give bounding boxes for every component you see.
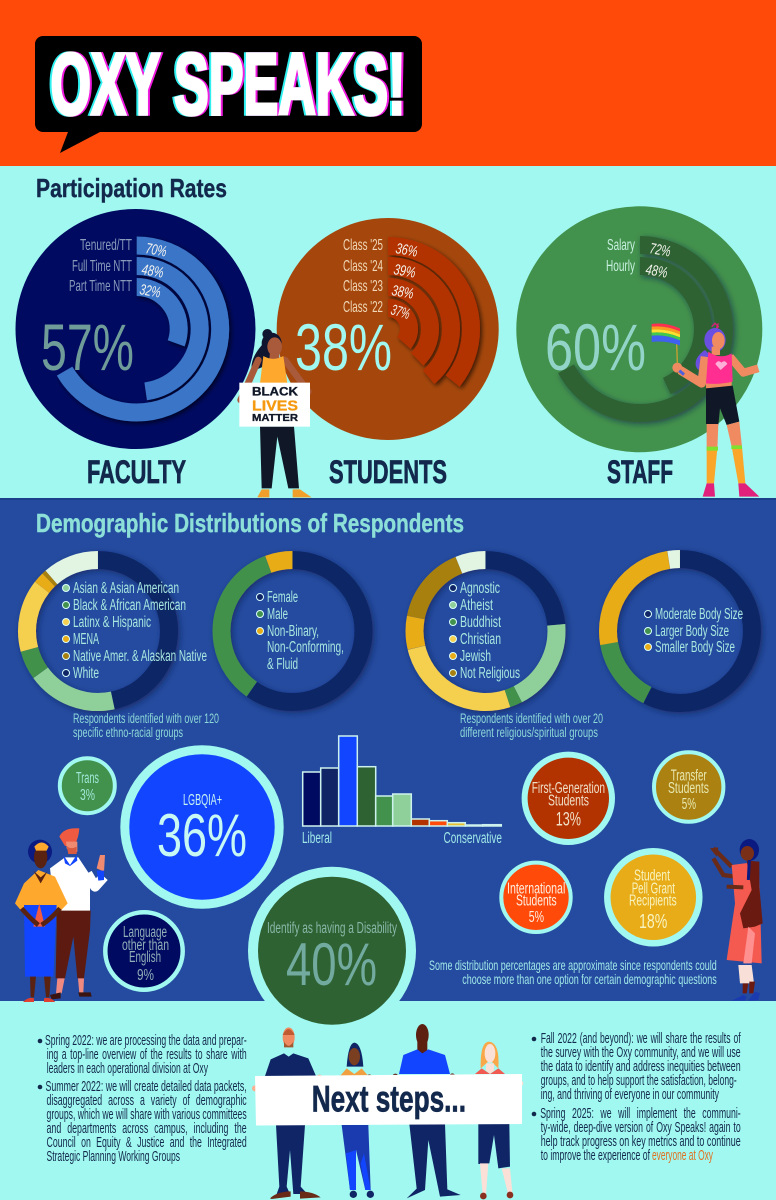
stat: language: English (129, 949, 161, 966)
donut: ethno-racial (0, 531, 219, 740)
text: next steps left column: Summer 2022: we will create detailed data packets, (46, 1078, 247, 1095)
pride flag (652, 324, 680, 345)
student ring percentages: 38% (390, 282, 415, 303)
stat: LGBQIA+: 36% (157, 802, 247, 869)
axis labels: Liberal (302, 830, 332, 847)
students label: STUDENTS (329, 454, 447, 490)
note (460, 711, 603, 740)
faculty ring percentages: 32% (138, 281, 162, 302)
legend (62, 580, 207, 682)
stat: first-generation (525, 755, 612, 842)
staff ring percentages: 72% (648, 240, 672, 261)
faculty label: FACULTY (87, 454, 186, 490)
student rings (305, 246, 471, 412)
panel: staff participation (516, 206, 762, 490)
text: next steps left column: leaders in each operational division at Oxy (47, 1060, 208, 1077)
student ring percentages (389, 240, 419, 323)
ring segments (390, 536, 581, 726)
stat: first-generation: First-Generation (532, 780, 605, 797)
legend: Larger Body Size (655, 623, 729, 640)
note: Respondents identified with over 20 (460, 711, 603, 726)
stat: transfer: Transfer (671, 768, 707, 785)
bar chart: political spectrum (302, 736, 502, 847)
stat: trans: Trans (76, 770, 99, 787)
student labels: Class '22 (343, 299, 383, 316)
faculty rings (53, 246, 220, 412)
axis labels: Conservative (444, 830, 502, 847)
text: next steps left column: ing a top-line overview of the results to share with (47, 1046, 247, 1063)
stat: disability: 40% (286, 931, 377, 998)
stat: language: other than (122, 937, 169, 954)
faculty labels (69, 237, 132, 295)
legend: Latinx & Hispanic (73, 614, 151, 631)
legend: Christian (460, 631, 501, 648)
ring segments (194, 532, 391, 730)
faculty ring percentages: 48% (140, 261, 165, 282)
illustration: couple (15, 828, 105, 1002)
panel: faculty participation (16, 209, 256, 490)
illustration: woman gesturing (710, 839, 763, 1001)
legend: Native Amer. & Alaskan Native (73, 648, 207, 665)
staff ring percentages: 48% (644, 261, 669, 282)
legend: Non-Conforming, (267, 639, 344, 656)
text: next steps right column: everyone at Oxy (652, 1147, 713, 1164)
student ring percentages: 37% (389, 302, 412, 323)
stat: pell grant: Recipients (629, 893, 677, 910)
faculty labels: Full Time NTT (72, 258, 132, 275)
person 4 (475, 1042, 523, 1199)
stat: international: Students (516, 893, 557, 910)
heading: participation rates: Participation Rates (36, 173, 227, 203)
note: specific ethno-racial groups (73, 725, 183, 740)
bottom mint band (0, 1001, 776, 1200)
stat: LGBQIA+ (125, 750, 279, 904)
heading: demographic distributions: Demographic Distributions of Respondents (36, 508, 464, 538)
legend: White (73, 665, 99, 682)
staff rings (556, 245, 724, 413)
ring segments (0, 531, 198, 731)
title: OXY SPEAKS! (52, 36, 408, 133)
note: Respondents identified with over 120 (73, 711, 219, 726)
stat: LGBQIA+: LGBQIA+ (183, 792, 222, 809)
faculty labels: Part Time NTT (69, 278, 132, 295)
stat: first-generation: Students (548, 793, 589, 810)
donut: body size (583, 534, 776, 728)
donut: gender (194, 532, 391, 730)
title (48, 36, 408, 133)
text: next steps left column: disaggregated across a variety of demographic (46, 1092, 247, 1109)
student labels: Class '23 (343, 278, 383, 295)
stat: international: 5% (529, 909, 544, 926)
note (73, 711, 219, 740)
sign text: MATTER (252, 413, 298, 424)
speech bubble (35, 36, 422, 153)
legend: Asian & Asian American (73, 580, 179, 597)
illustration: woman with sign (239, 329, 312, 497)
stat: pell grant: 18% (639, 911, 667, 933)
stat: transfer: Students (668, 780, 709, 797)
legend: Atheist (460, 597, 493, 614)
legend (644, 606, 743, 656)
stat: pell grant: Student (634, 868, 670, 885)
ring segments (583, 534, 776, 728)
staff labels: Salary (607, 237, 635, 254)
sign text: LIVES (252, 399, 298, 415)
legend: MENA (73, 631, 99, 648)
stat: language (105, 912, 183, 990)
stat: international: International (507, 880, 565, 897)
illustration: people holding next steps banner (252, 1024, 523, 1199)
banner text: Next steps... (312, 1079, 466, 1120)
legend: Buddhist (460, 614, 501, 631)
stat: transfer (654, 752, 723, 822)
legend: Jewish (460, 648, 491, 665)
illustration: woman with pride flag (652, 323, 759, 497)
stat: disability (253, 872, 411, 1030)
legend (256, 589, 344, 673)
sign text (252, 385, 298, 424)
text: next steps right column: to improve the experience of (541, 1147, 650, 1164)
sign text: BLACK (252, 385, 298, 399)
legend: Not Religious (460, 665, 520, 682)
person 2 (337, 1043, 374, 1198)
text: next steps right column (532, 1030, 741, 1164)
text: next steps left column: groups, which we will share with various committees (46, 1106, 247, 1123)
faculty overall: 57% (41, 310, 134, 384)
legend: & Fluid (267, 656, 298, 673)
staff labels (606, 237, 635, 275)
student labels (343, 237, 383, 316)
legend: Agnostic (460, 580, 500, 597)
stat: pell grant (607, 851, 699, 943)
staff labels: Hourly (606, 258, 635, 275)
donut: religion (390, 536, 603, 740)
staff overall: 60% (545, 310, 646, 384)
legend: Black & African American (73, 597, 186, 614)
note: different religious/spiritual groups (460, 725, 598, 740)
legend: Female (267, 589, 298, 606)
stat: language: 9% (137, 967, 154, 984)
person 3 (392, 1024, 461, 1198)
person 1 (252, 1027, 323, 1199)
legend: Non-Binary, (267, 623, 319, 640)
faculty ring percentages: 70% (144, 240, 168, 261)
axis labels (302, 830, 502, 847)
stat: trans (60, 758, 115, 813)
stat: first-generation: 13% (556, 810, 581, 831)
students overall: 38% (295, 310, 392, 384)
text: next steps left column: and departments across campus, including the (46, 1120, 247, 1137)
student labels: Class '24 (343, 258, 383, 275)
legend: Male (267, 606, 288, 623)
panel: demographics background (0, 498, 776, 1001)
text: next steps left column: Strategic Planning Working Groups (46, 1148, 180, 1165)
title: OXY SPEAKS! (50, 36, 406, 133)
panel: student participation (277, 218, 499, 490)
stat: language: Language (123, 924, 167, 941)
stat: transfer: 5% (682, 796, 696, 813)
banner (255, 1074, 522, 1126)
text: next steps left column: Council on Equity & Justice and the Integrated (46, 1134, 247, 1151)
staff label: STAFF (607, 454, 673, 490)
title: OXY SPEAKS! (48, 36, 404, 133)
faculty ring percentages (138, 240, 168, 302)
staff ring percentages (644, 240, 672, 282)
legend (450, 580, 520, 682)
faculty labels: Tenured/TT (80, 237, 132, 254)
footnote (429, 957, 717, 987)
stat: disability: Identify as having a Disability (267, 920, 397, 937)
stat: trans: 3% (80, 787, 95, 804)
stat: international (501, 863, 571, 932)
header band (0, 0, 776, 166)
student labels: Class '25 (343, 237, 383, 254)
student ring percentages: 39% (392, 261, 417, 282)
text: next steps left column (38, 1032, 247, 1165)
text: next steps left column: Spring 2022: we are processing the data and prepar- (45, 1032, 247, 1049)
student ring percentages: 36% (394, 240, 419, 261)
stat: pell grant: Pell Grant (632, 880, 675, 897)
